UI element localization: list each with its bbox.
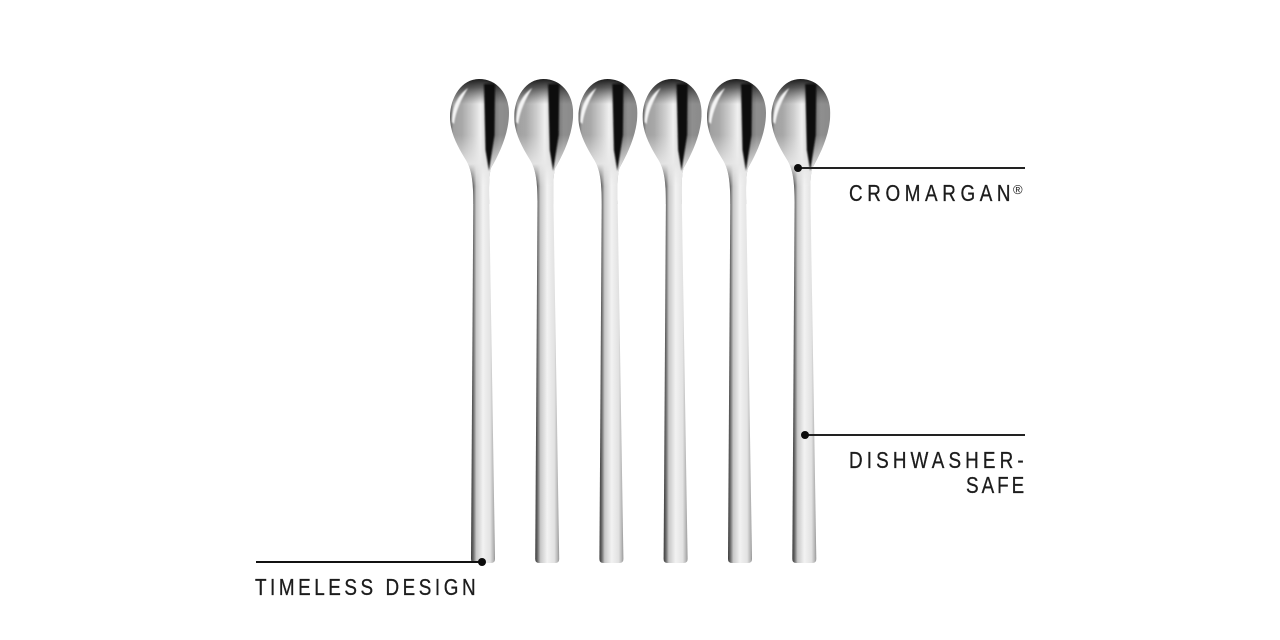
spoon 3 xyxy=(573,75,643,563)
spoon 6 xyxy=(766,75,836,563)
callout: dishwasher-safe: SAFE xyxy=(966,473,1024,498)
spoon 4 xyxy=(638,75,708,563)
callout: timeless design: TIMELESS DESIGN xyxy=(255,575,476,600)
callout: timeless design xyxy=(255,558,486,600)
callout: Cromargan xyxy=(794,164,1025,206)
spoon 2 xyxy=(509,75,579,563)
spoon 1 xyxy=(445,75,515,563)
callout: dishwasher-safe xyxy=(801,431,1025,498)
callout: Cromargan: ® xyxy=(1013,182,1023,197)
callout: dishwasher-safe: DISHWASHER- xyxy=(849,448,1024,473)
spoon 5 xyxy=(702,75,772,563)
callout: Cromargan: CROMARGAN xyxy=(849,181,1011,206)
